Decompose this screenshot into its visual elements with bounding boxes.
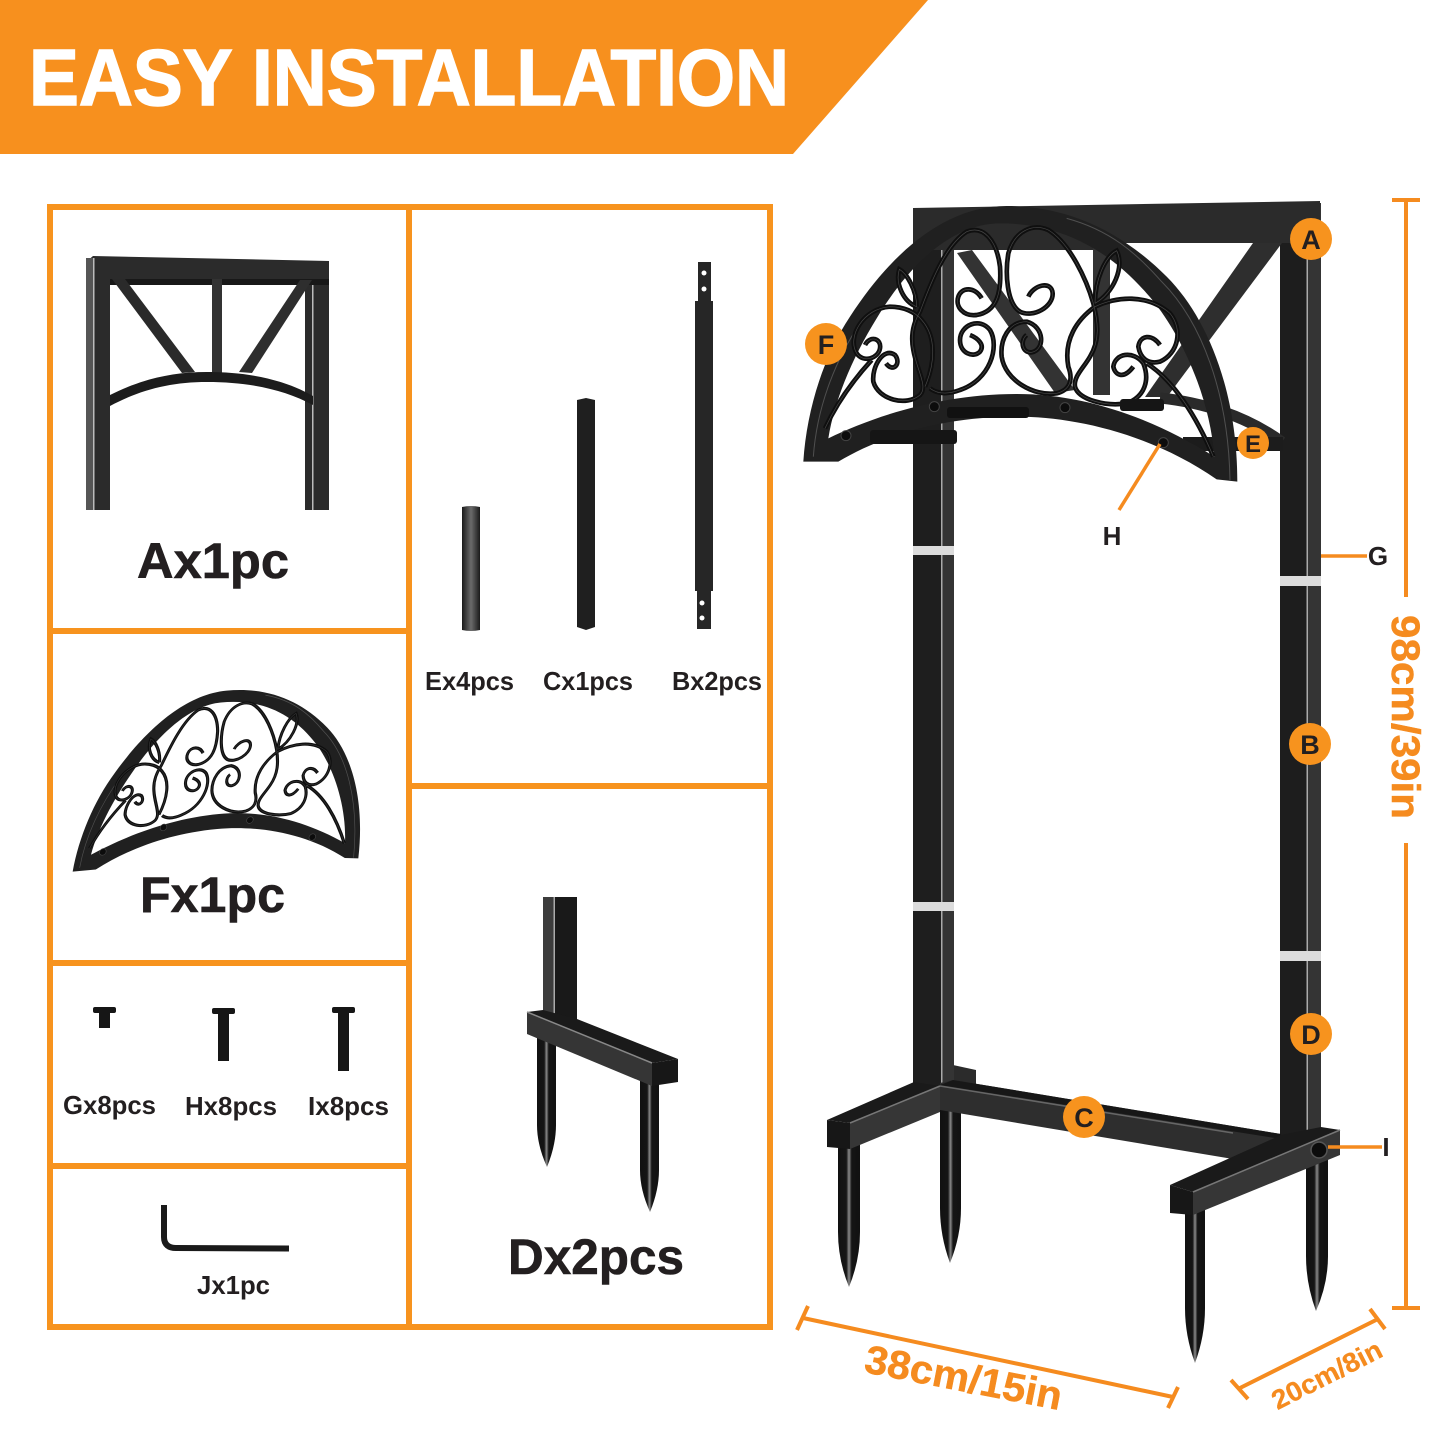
frame columns and top bar: [913, 201, 1321, 1143]
leader: I: [1328, 1132, 1390, 1162]
panel: parts E C B: [409, 207, 770, 786]
marker: F: [805, 323, 847, 365]
label: Ex4pcs: Ex4pcs: [425, 666, 514, 696]
label: G: G: [1368, 541, 1388, 571]
marker: A: A: [1301, 225, 1321, 255]
panel: part A: [50, 207, 409, 631]
marker: D: D: [1301, 1020, 1321, 1050]
marker: E: E: [1245, 431, 1261, 458]
marker: D: [1290, 1013, 1332, 1055]
leader: G: [1321, 541, 1388, 571]
marker: C: [1063, 1096, 1105, 1138]
marker: B: B: [1300, 730, 1320, 760]
label: Bx2pcs: Bx2pcs: [672, 666, 762, 696]
back stakes and feet: [838, 1065, 1328, 1363]
label: Jx1pc: Jx1pc: [197, 1270, 270, 1300]
dimension: depth: [1231, 1309, 1387, 1416]
icon: stake assembly D: [527, 897, 678, 1212]
panel: part D: [409, 786, 770, 1327]
label: Fx1pc: Fx1pc: [140, 867, 285, 923]
marker: E: [1237, 427, 1269, 459]
title banner: [0, 0, 928, 154]
icon: bar B: [695, 262, 713, 629]
icon: post C: [577, 398, 595, 630]
icon: screw H: [212, 1008, 235, 1061]
dimension: height: [1383, 200, 1427, 1308]
title text: EASY INSTALLATION: [29, 33, 789, 122]
dimension: width: [797, 1306, 1178, 1419]
icon: hex key J: [164, 1205, 289, 1248]
base crossbar and feet: [827, 1080, 1340, 1215]
label: 38cm/15in: 38cm/15in: [861, 1338, 1066, 1419]
marker: B: [1289, 723, 1331, 765]
marker: A: [1290, 218, 1332, 260]
label: Cx1pcs: Cx1pcs: [543, 666, 633, 696]
label: H: H: [1103, 521, 1121, 551]
label: Hx8pcs: Hx8pcs: [185, 1091, 277, 1121]
marker: F: F: [818, 330, 834, 360]
label: Dx2pcs: Dx2pcs: [508, 1229, 684, 1285]
label: I: I: [1382, 1132, 1390, 1162]
hose arch F with hanger tubes: [803, 206, 1237, 482]
icon: arch F: [71, 677, 379, 885]
label: 20cm/8in: 20cm/8in: [1267, 1334, 1387, 1416]
icon: screw G: [93, 1007, 116, 1028]
label: Ix8pcs: Ix8pcs: [308, 1091, 389, 1121]
leader: H: [1103, 444, 1160, 551]
panel: hex key: [50, 1166, 409, 1327]
icon: top frame A: [86, 256, 329, 510]
label: 98cm/39in: 98cm/39in: [1383, 615, 1427, 819]
label: Ax1pc: Ax1pc: [137, 533, 289, 589]
panel: part F: [50, 631, 409, 963]
icon: screw I: [332, 1007, 355, 1071]
panel: screws: [50, 963, 409, 1166]
label: Gx8pcs: Gx8pcs: [63, 1090, 156, 1120]
marker: C: C: [1074, 1103, 1094, 1133]
icon: tube E: [462, 506, 480, 631]
assembled stand illustration: [803, 201, 1340, 1363]
